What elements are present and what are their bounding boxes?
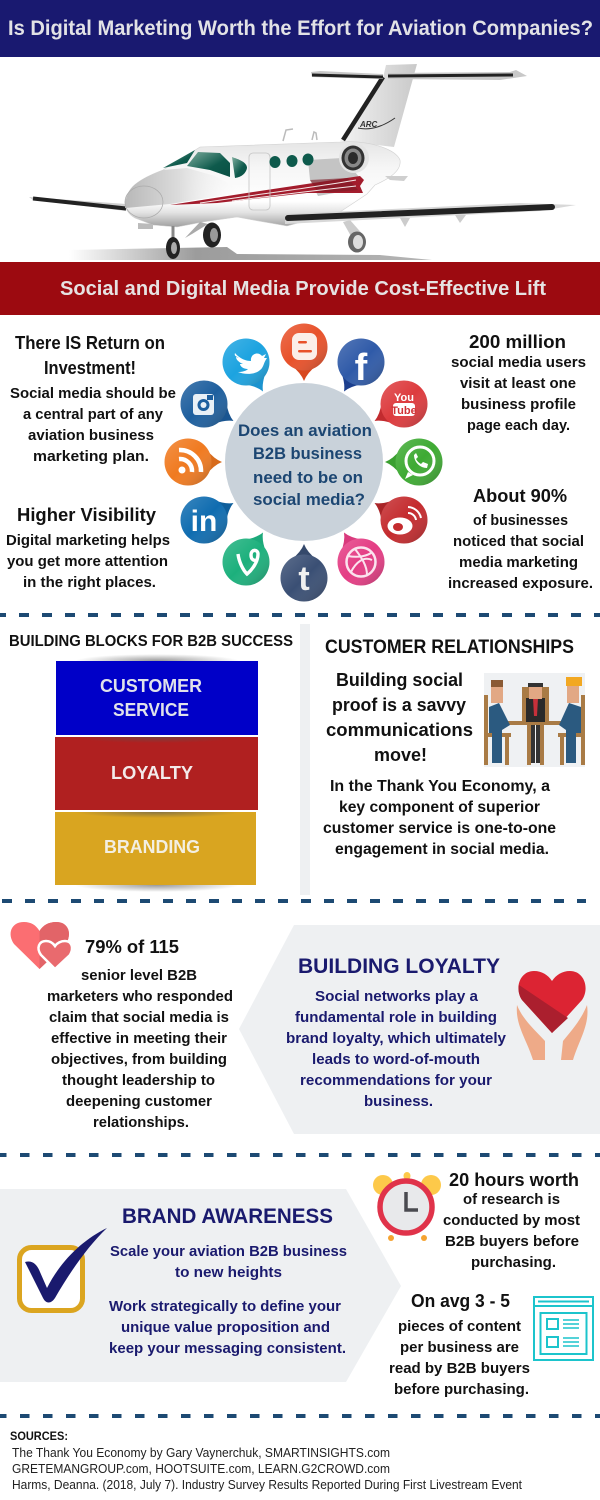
icon: alarm clock [373, 1172, 441, 1241]
text: social networks: brand loyalty, which ultimately [286, 1030, 507, 1047]
engine shadow patch [308, 158, 360, 196]
text block: on avg 3 - 5: per business are [400, 1339, 519, 1356]
text block: return on investment: There IS Return on [15, 332, 165, 353]
text block: return on investment: Investment! [44, 357, 136, 378]
panel: customer relationships [323, 637, 585, 858]
block: customer service: SERVICE [113, 700, 189, 720]
text block: return on investment: marketing plan. [33, 448, 149, 465]
block: branding: BRANDING [104, 837, 200, 857]
text block: return on investment: aviation business [28, 427, 154, 444]
cabin windows [270, 154, 314, 168]
icon: business meeting [484, 673, 585, 767]
divider [0, 613, 600, 617]
sources: Harms, Deanna. (2018, July 7). Industry Survey Results Reported During First Livestream Event [12, 1478, 522, 1492]
divider [2, 899, 586, 903]
text block: 79% of 115: effective in meeting their [51, 1030, 227, 1047]
engine intake [339, 143, 369, 173]
cockpit windows [163, 150, 247, 178]
text block: higher visibility: Higher Visibility [17, 504, 157, 525]
icon: youtube: Tube [391, 405, 417, 417]
text block: about 90% [448, 485, 593, 592]
text: scale: to new heights [175, 1264, 282, 1281]
text block: 20 hours worth: conducted by most [443, 1212, 580, 1229]
central circle question [225, 383, 383, 541]
text block: 20 hours worth [443, 1169, 580, 1271]
nose cone outline [125, 186, 163, 218]
text: social networks: recommendations for your [300, 1072, 492, 1089]
text block: on avg 3 - 5: On avg 3 - 5 [411, 1290, 510, 1311]
text: social proof: communications [326, 719, 473, 740]
text: thank you economy: In the Thank You Economy, a [330, 778, 550, 795]
text block: 79% of 115: thought leadership to [62, 1072, 215, 1089]
text block: 200 million: business profile [461, 396, 576, 413]
text block: 20 hours worth: purchasing. [471, 1254, 556, 1271]
text block: 20 hours worth: 20 hours worth [449, 1169, 579, 1190]
sources: The Thank You Economy by Gary Vaynerchuk, SMARTINSIGHTS.com [12, 1446, 390, 1460]
text block: on avg 3 - 5 [389, 1290, 530, 1398]
text: social networks: fundamental role in building [295, 1009, 497, 1026]
fuselage stripes [170, 176, 364, 205]
divider [0, 1153, 600, 1157]
ground shadow [69, 247, 432, 260]
icon: heart in hands [517, 971, 588, 1060]
text block: return on investment [10, 332, 176, 465]
text block: return on investment: a central part of any [23, 406, 164, 423]
fuselage [125, 142, 400, 227]
title banner [0, 0, 600, 57]
text block: on avg 3 - 5: pieces of content [398, 1318, 521, 1335]
text block: 79% of 115: objectives, from building [51, 1051, 227, 1068]
text: work strategically: Work strategically to define your [109, 1298, 341, 1315]
social media wheel [164, 324, 442, 602]
text block: about 90%: noticed that social [453, 533, 584, 550]
icon: facebook [333, 338, 384, 398]
icon: linkedin: in [191, 505, 217, 538]
icon: document [534, 1297, 593, 1360]
text block: 79% of 115: deepening customer [66, 1093, 212, 1110]
text block: 79% of 115: senior level B2B [81, 967, 197, 984]
text: scale: Scale your aviation B2B business [110, 1243, 347, 1260]
central circle question: need to be on [253, 468, 363, 487]
text block: 200 million: 200 million [469, 331, 566, 352]
landing gear [138, 220, 366, 259]
text block: 200 million: page each day. [467, 417, 570, 434]
block: customer service [56, 661, 258, 735]
subtitle banner [0, 262, 600, 315]
icon: tumblr: t [298, 560, 310, 598]
icon: instagram [180, 380, 240, 432]
block: loyalty: LOYALTY [111, 763, 193, 783]
text block: higher visibility: in the right places. [23, 574, 156, 591]
icon: whatsapp [385, 438, 442, 486]
icon: tumblr [280, 544, 328, 602]
text: thank you economy [323, 778, 556, 858]
panel: brand awareness [0, 1189, 401, 1382]
panel: building blocks [9, 633, 293, 892]
sources: GRETEMANGROUP.com, HOOTSUITE.com, LEARN.G2CROWD.com [12, 1462, 390, 1476]
icon: vine [222, 526, 274, 586]
text block: 79% of 115 [47, 936, 233, 1131]
text: social networks: leads to word-of-mouth [312, 1051, 480, 1068]
block: loyalty [55, 731, 258, 810]
nose shading [125, 168, 245, 208]
text: social proof: move! [374, 744, 427, 765]
text block: 20 hours worth: of research is [463, 1191, 560, 1208]
text: social networks: business. [364, 1093, 433, 1110]
icon: rss [164, 438, 222, 486]
icon: weibo [368, 492, 428, 544]
near wing [285, 176, 576, 227]
tail fin: ARC [359, 120, 378, 129]
illustration: private jet [29, 64, 576, 260]
text block: 200 million: social media users [451, 354, 586, 371]
text block: higher visibility [6, 504, 170, 591]
block: branding [55, 806, 256, 885]
text block: return on investment: Social media should be [10, 385, 176, 402]
icon: youtube [368, 380, 428, 432]
icon: linkedin [180, 492, 240, 544]
text: social proof [326, 669, 473, 765]
sources: SOURCES: [10, 1431, 68, 1443]
antennas [283, 129, 317, 141]
text: thank you economy: key component of superior [339, 799, 540, 816]
text block: 200 million [451, 331, 586, 434]
icon: hearts [11, 922, 72, 969]
central circle question: B2B business [253, 444, 362, 463]
tail fin [340, 64, 417, 147]
door outline [249, 153, 270, 210]
text block: 79% of 115: relationships. [93, 1114, 189, 1131]
heading: brand awareness: BRAND AWARENESS [122, 1205, 333, 1228]
text block: higher visibility: you get more attention [7, 553, 168, 570]
divider [0, 1414, 600, 1418]
text block: about 90%: increased exposure. [448, 575, 593, 592]
icon: facebook: f [355, 347, 368, 389]
text block: about 90%: About 90% [473, 485, 567, 506]
text block: 200 million: visit at least one [460, 375, 576, 392]
icon: blogger [280, 324, 328, 381]
text block: 79% of 115: claim that social media is [49, 1009, 229, 1026]
far wing [29, 197, 126, 211]
panel: building loyalty [239, 925, 600, 1134]
vertical separator [300, 624, 310, 895]
text: social proof: proof is a savvy [332, 694, 467, 715]
text: thank you economy: engagement in social media. [335, 841, 549, 858]
text block: on avg 3 - 5: read by B2B buyers [389, 1360, 530, 1377]
text block: higher visibility: Digital marketing helps [6, 532, 170, 549]
heading: building loyalty: BUILDING LOYALTY [298, 955, 500, 978]
text: social networks: Social networks play a [315, 988, 479, 1005]
block shadows [75, 654, 239, 892]
sources [10, 1431, 522, 1492]
heading: building blocks: BUILDING BLOCKS FOR B2B SUCCESS [9, 633, 293, 650]
text: social proof: Building social [336, 669, 463, 690]
text block: on avg 3 - 5: before purchasing. [394, 1381, 529, 1398]
subtitle banner: Social and Digital Media Provide Cost-Effective Lift [60, 278, 546, 300]
text: work strategically: unique value proposition and [121, 1319, 330, 1336]
text: social networks [286, 988, 507, 1110]
icon: youtube: You [394, 392, 414, 404]
text: thank you economy: customer service is one-to-one [323, 820, 556, 837]
text: work strategically: keep your messaging consistent. [109, 1340, 346, 1357]
text block: 20 hours worth: B2B buyers before [445, 1233, 579, 1250]
heading: customer relationships: CUSTOMER RELATIONSHIPS [325, 637, 574, 658]
horizontal stabilizer [311, 70, 527, 80]
text block: about 90%: of businesses [473, 512, 568, 529]
text block: 79% of 115: marketers who responded [47, 988, 233, 1005]
block: customer service: CUSTOMER [100, 676, 202, 696]
text: work strategically [109, 1298, 346, 1357]
text block: about 90%: media marketing [459, 554, 578, 571]
text: scale [110, 1243, 347, 1281]
central circle question: social media? [253, 490, 365, 509]
icon: twitter [222, 338, 274, 398]
central circle question: Does an aviation [238, 421, 372, 440]
icon: dribbble [333, 526, 384, 586]
icon: checkmark [20, 1228, 107, 1310]
text block: 79% of 115: 79% of 115 [85, 936, 179, 957]
